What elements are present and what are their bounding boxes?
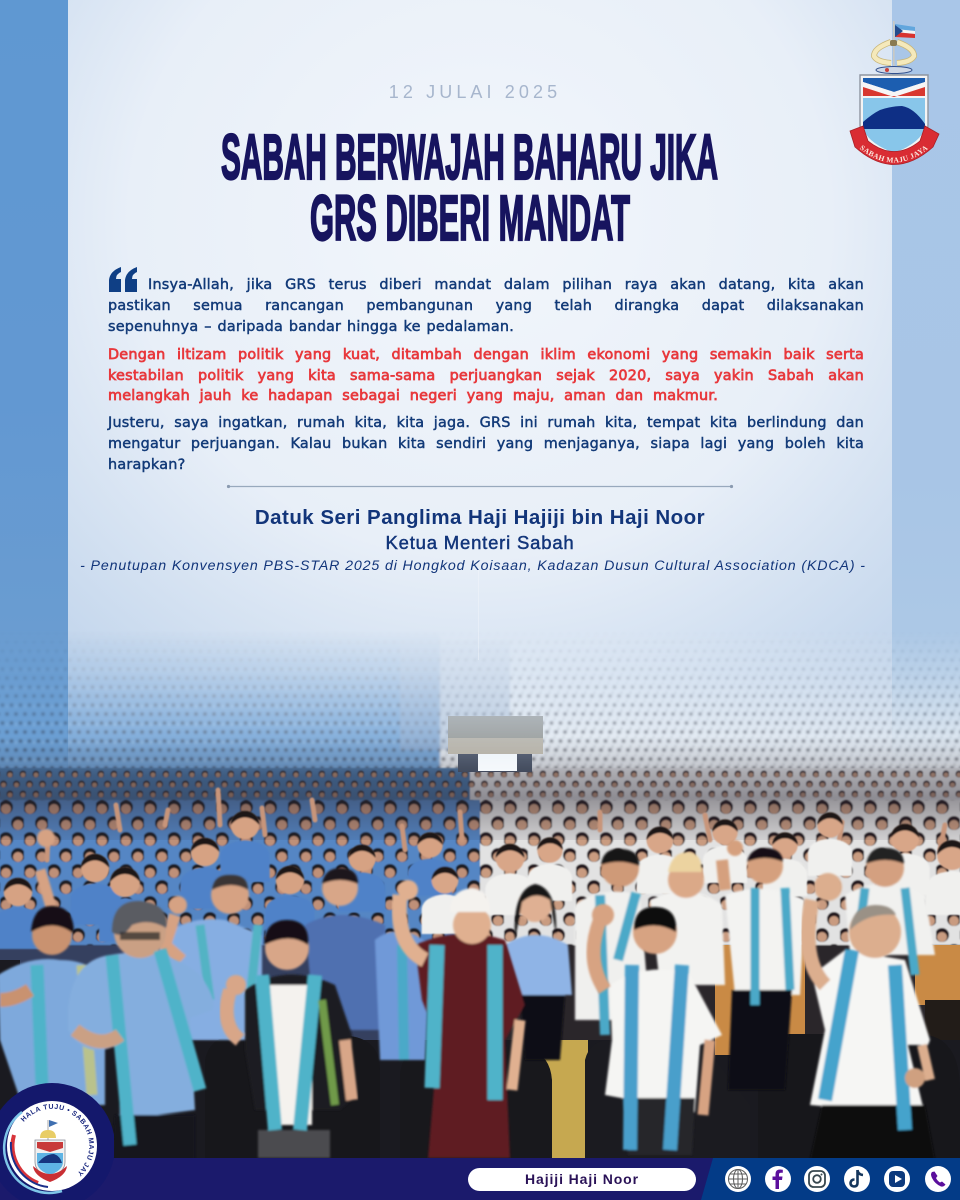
icon: quotation mark xyxy=(109,267,137,292)
event source: - Penutupan Konvensyen PBS-STAR 2025 di Hongkod Koisaan, Kadazan Dusun Cultural Association (KDCA) - xyxy=(80,558,866,574)
quote paragraph 1: pastikan semua rancangan pembangunan yang telah dirangka dapat dilaksanakan xyxy=(108,298,864,314)
crowd masked fade group xyxy=(0,625,960,1055)
date: 12 JULAI 2025 xyxy=(389,82,561,102)
stage structure xyxy=(448,716,543,772)
icon: instagram xyxy=(804,1166,830,1192)
small crest xyxy=(33,1120,67,1182)
person: man in white, centre right xyxy=(592,904,722,1155)
icon: phone xyxy=(925,1166,951,1192)
people: back row xyxy=(37,829,935,1090)
crowd shadow band xyxy=(0,735,960,840)
icon: web xyxy=(725,1166,751,1192)
icon: Sabah coat of arms xyxy=(850,21,940,165)
quote paragraph 1 xyxy=(108,277,864,335)
social icons xyxy=(725,1166,951,1192)
quote paragraph 1: Insya-Allah, jika GRS terus diberi mandat dalam pilihan raya akan datang, kita akan xyxy=(148,277,864,293)
title: GRS DIBERI MANDAT xyxy=(310,182,630,254)
shield xyxy=(860,75,928,156)
flag xyxy=(893,21,915,69)
name pill: Hajiji Haji Noor xyxy=(525,1171,639,1187)
crowd: raised fists xyxy=(47,790,945,880)
person: centre man in black vest xyxy=(226,920,352,1158)
panel: central light panel xyxy=(68,0,892,790)
panel: side bands xyxy=(0,0,960,790)
people: left pair with scarves xyxy=(0,901,214,1160)
icon: facebook xyxy=(765,1166,791,1192)
ribbon xyxy=(850,125,940,165)
crowd: mid-ground people xyxy=(0,811,960,949)
divider xyxy=(226,484,734,488)
crowd: near rows xyxy=(0,800,960,1055)
emblem badge: Hala Tuju Sabah Maju Jaya xyxy=(0,1083,114,1194)
quote paragraph 3: mengatur perjuangan. Kalau bukan kita sendiri yang menjaganya, siapa lagi yang boleh kita xyxy=(108,436,864,452)
quote paragraph 2 xyxy=(108,347,864,404)
footer bar xyxy=(0,1158,960,1200)
icon: tiktok xyxy=(844,1166,870,1192)
quote paragraph 2: melangkah jauh ke hadapan sebagai negeri yang maju, aman dan makmur. xyxy=(108,388,718,404)
speaker role: Ketua Menteri Sabah xyxy=(385,532,574,553)
ribbon: SABAH MAJU JAYA xyxy=(860,146,928,163)
light ray xyxy=(478,570,479,660)
quote paragraph 3 xyxy=(107,415,864,473)
quote paragraph 1: sepenuhnya – daripada bandar hingga ke pedalaman. xyxy=(108,319,514,335)
crowd: middle rows xyxy=(0,767,960,801)
quote paragraph 3: harapkan? xyxy=(108,457,185,473)
crowd: far rows xyxy=(0,642,960,769)
title xyxy=(221,121,718,254)
quote paragraph 2: Dengan iltizam politik yang kuat, ditambah dengan iklim ekonomi yang semakin baik serta xyxy=(108,347,864,363)
quote paragraph 3: Justeru, saya ingatkan, rumah kita, kita jaga. GRS ini rumah kita, tempat kita berlindung dan xyxy=(108,415,864,431)
swoosh xyxy=(4,1112,62,1193)
icon: youtube xyxy=(884,1166,910,1192)
person: man in maroon with white cap xyxy=(398,880,525,1158)
hands and wreath xyxy=(874,40,914,74)
speaker name: Datuk Seri Panglima Haji Hajiji bin Haji Noor xyxy=(255,506,705,529)
seats and floor xyxy=(0,945,960,1160)
quote paragraph 2: kestabilan politik yang kita sama-sama perjuangkan sejak 2020, saya yakin Sabah akan xyxy=(108,368,864,384)
person: older man in white, right xyxy=(808,873,935,1160)
name pill xyxy=(468,1168,696,1191)
